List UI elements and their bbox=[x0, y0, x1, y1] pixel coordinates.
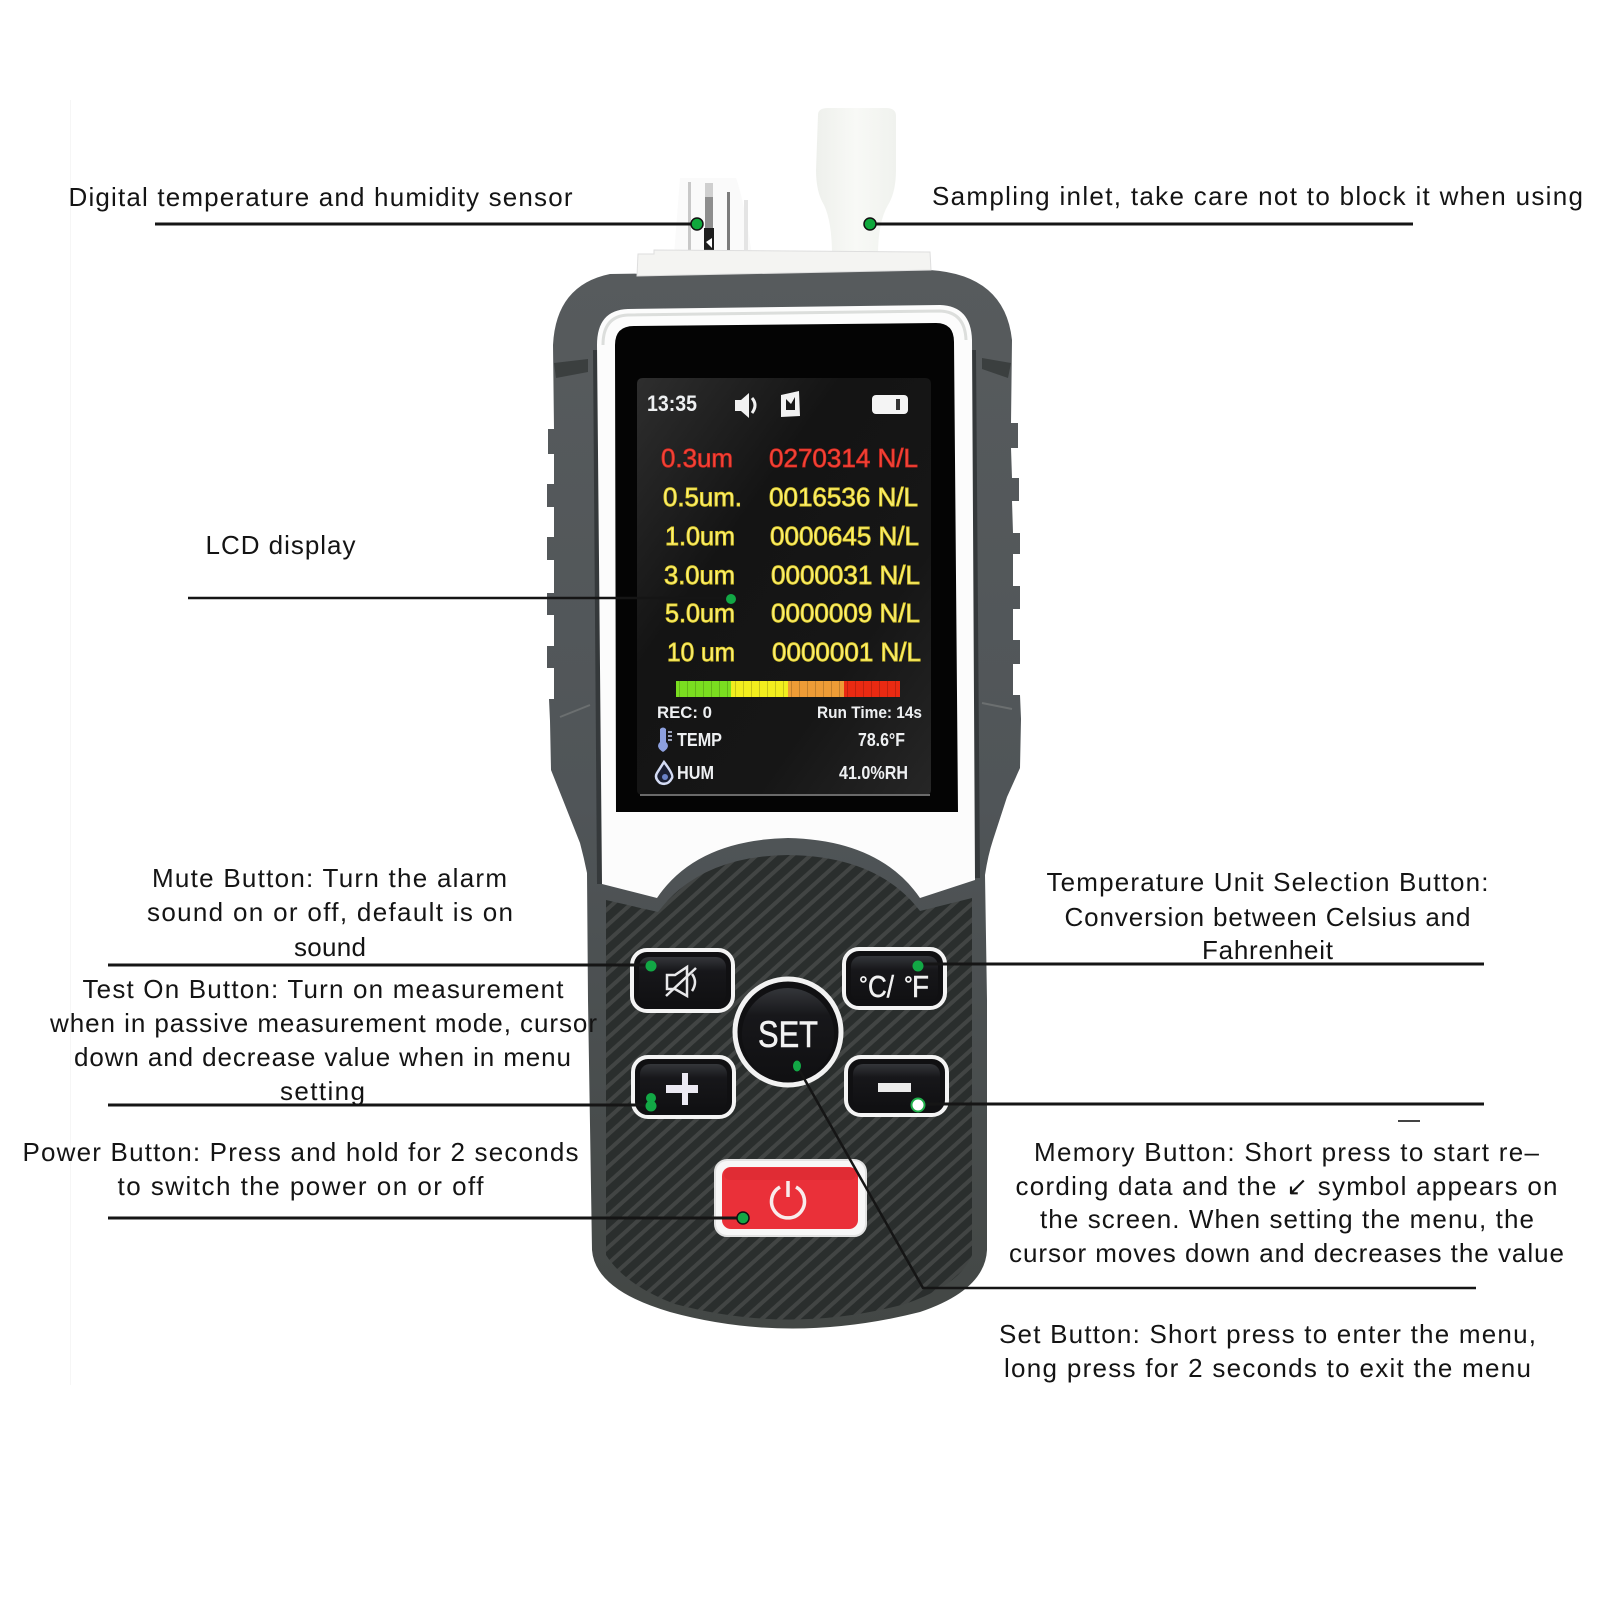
SD card icon bbox=[781, 391, 800, 417]
label: mute button: sound bbox=[294, 932, 366, 962]
label: set button bbox=[999, 1319, 1536, 1383]
label: LCD display: LCD display bbox=[206, 530, 356, 560]
reading rows: 0000645 N/L bbox=[770, 521, 919, 551]
mute icon bbox=[666, 967, 696, 996]
label: memory button: the screen. When setting the menu, the bbox=[1040, 1204, 1534, 1234]
thermometer icon bbox=[658, 728, 672, 752]
label: power button bbox=[22, 1137, 578, 1201]
LCD panel bbox=[637, 378, 931, 795]
reading rows: 0.3um bbox=[661, 443, 733, 473]
reading rows: 5.0um bbox=[665, 598, 735, 628]
label: memory button: cursor moves down and decreases the value bbox=[1009, 1238, 1564, 1268]
sampling inlet nozzle bbox=[816, 108, 896, 255]
set button: SET bbox=[758, 1014, 818, 1055]
temperature unit button: ° bbox=[859, 972, 868, 997]
status lines: 78.6°F bbox=[858, 730, 905, 750]
label: mute button: Mute Button: Turn the alarm bbox=[152, 863, 507, 893]
power icon bbox=[772, 1181, 804, 1218]
minus button bbox=[846, 1057, 947, 1115]
white bezel bbox=[597, 305, 975, 898]
reading rows: 0.5um. bbox=[663, 482, 742, 512]
power button bbox=[715, 1160, 866, 1236]
label: temperature unit selection button: Fahrenheit bbox=[1202, 935, 1334, 965]
reading rows: 0000001 N/L bbox=[772, 637, 921, 667]
screen bbox=[615, 323, 958, 812]
callout lines bbox=[108, 224, 1484, 1288]
label: memory button bbox=[1009, 1137, 1564, 1268]
label: temperature unit selection button bbox=[1046, 867, 1488, 965]
label: set button: long press for 2 seconds to exit the menu bbox=[1004, 1353, 1531, 1383]
bezel side shading bbox=[593, 350, 980, 884]
reading rows: 0000009 N/L bbox=[771, 598, 920, 628]
label: temperature unit selection button: Conversion between Celsius and bbox=[1064, 902, 1470, 932]
speaker icon bbox=[735, 393, 755, 418]
reading rows: 0016536 N/L bbox=[769, 482, 918, 512]
stray marks bbox=[1398, 1120, 1420, 1122]
label: test on button: down and decrease value when in menu bbox=[74, 1042, 571, 1072]
body seams bbox=[560, 703, 1012, 717]
reading rows bbox=[661, 443, 921, 667]
bezel shade bbox=[603, 311, 966, 345]
label: set button: Set Button: Short press to enter the menu, bbox=[999, 1319, 1536, 1349]
reading rows: 0270314 N/L bbox=[769, 443, 918, 473]
label: sampling inlet: Sampling inlet, take care not to block it when using bbox=[932, 181, 1583, 211]
label: power button: to switch the power on or off bbox=[118, 1171, 484, 1201]
device body bbox=[547, 270, 1021, 1328]
clock: 13:35 bbox=[647, 391, 697, 416]
reading rows: 1.0um bbox=[665, 521, 735, 551]
status lines: 41.0%RH bbox=[839, 763, 908, 783]
label: test on button: when in passive measurement mode, cursor bbox=[49, 1008, 597, 1038]
callout dots bbox=[646, 218, 924, 1224]
temperature and humidity sensor bbox=[674, 178, 752, 255]
status lines: TEMP bbox=[677, 730, 722, 750]
label: memory button: cording data and the ↙ symbol appears on bbox=[1016, 1171, 1558, 1201]
battery icon bbox=[872, 395, 908, 414]
status lines: HUM bbox=[677, 763, 714, 783]
white top cap bbox=[637, 250, 931, 276]
device: particle counter bbox=[547, 108, 1021, 1328]
reading rows: 0000031 N/L bbox=[771, 560, 920, 590]
body grip notches bbox=[554, 358, 1011, 378]
label: test on button: Test On Button: Turn on measurement bbox=[82, 974, 564, 1004]
status lines: REC: 0 bbox=[657, 703, 712, 722]
mute button bbox=[632, 950, 733, 1011]
label: temperature unit selection button: Temperature Unit Selection Button: bbox=[1046, 867, 1488, 897]
humidity drop icon bbox=[656, 762, 672, 784]
LCD lower edge bbox=[640, 794, 930, 796]
label: mute button: sound on or off, default is on bbox=[147, 897, 513, 927]
status lines bbox=[657, 703, 922, 783]
plus button bbox=[633, 1057, 734, 1117]
faint image edge bbox=[70, 100, 71, 1385]
air quality meter bbox=[676, 681, 900, 697]
temperature unit button: F bbox=[912, 969, 929, 1004]
label: power button: Power Button: Press and hold for 2 seconds bbox=[22, 1137, 578, 1167]
label: test on button bbox=[49, 974, 597, 1106]
label: memory button: Memory Button: Short press to start re– bbox=[1034, 1137, 1540, 1167]
reading rows: 10 um bbox=[667, 637, 735, 667]
temperature unit button bbox=[844, 949, 945, 1008]
reading rows: 3.0um bbox=[664, 560, 735, 590]
temperature unit button: ° bbox=[904, 972, 913, 997]
status lines: Run Time: 14s bbox=[817, 703, 922, 722]
label: mute button bbox=[147, 863, 513, 962]
keypad panel: carbon fibre bbox=[606, 855, 972, 1320]
set button bbox=[735, 979, 841, 1085]
temperature unit button: C/ bbox=[868, 969, 894, 1004]
label: test on button: setting bbox=[280, 1076, 365, 1106]
label: temperature and humidity sensor: Digital temperature and humidity sensor bbox=[68, 182, 573, 212]
